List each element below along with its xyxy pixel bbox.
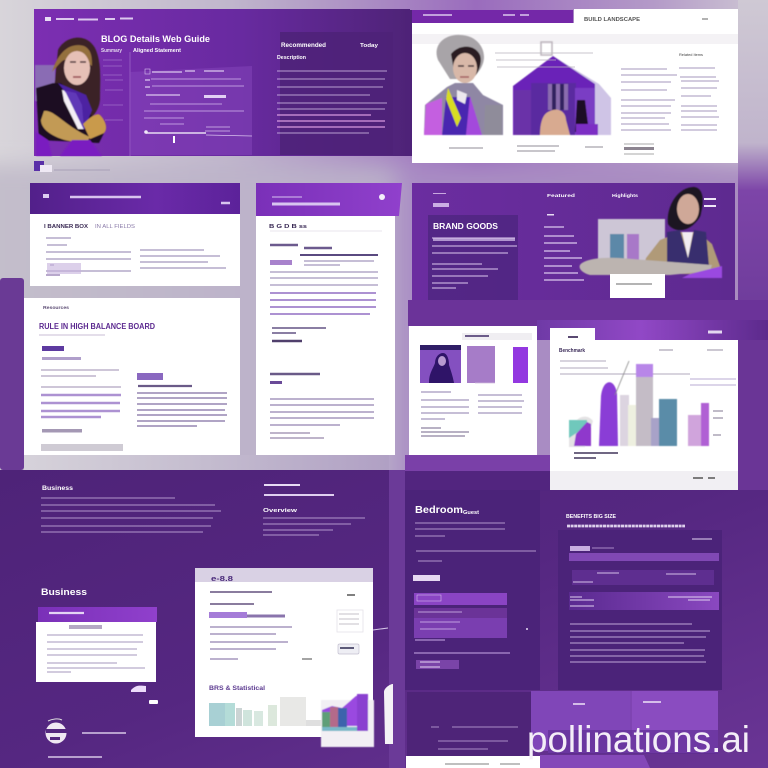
card header (38, 607, 157, 622)
top navigation (45, 17, 133, 21)
heading: B G D B ss (269, 224, 307, 230)
caption block (624, 144, 654, 154)
text card left (428, 193, 518, 300)
illustration: woman at desk (580, 187, 722, 278)
subsection two (272, 328, 326, 341)
article title: RULE IN HIGH BALANCE BOARD (39, 322, 155, 331)
right heading (612, 193, 716, 206)
body text (570, 624, 710, 662)
text section: top left dark: Business (42, 486, 74, 492)
sidebar menu: Summary (101, 48, 122, 54)
illustration: purple house with hand (513, 42, 611, 135)
report text (209, 592, 363, 659)
panel: hero with woman (34, 9, 410, 156)
small label: Resources (43, 305, 70, 310)
chart block (467, 346, 528, 383)
heading: IN ALL FIELDS (95, 224, 136, 230)
subsection one (270, 245, 378, 314)
column text (415, 523, 536, 561)
legend (690, 379, 736, 435)
overlapping report sheet (321, 694, 374, 747)
card text (47, 625, 145, 672)
subsection three (270, 374, 374, 438)
pale bar chart (209, 697, 322, 726)
panel: dark column with small cards (405, 490, 540, 690)
small button (416, 660, 459, 669)
column title: Bedroom (415, 505, 463, 516)
body text (46, 238, 226, 276)
article text columns (621, 52, 719, 130)
panel: white card with purple header (36, 607, 157, 682)
right text column: Description (277, 55, 307, 61)
card heading: Benchmark (559, 348, 585, 354)
logo caption (48, 733, 126, 757)
sidebar menu (101, 48, 130, 156)
card stack (414, 593, 507, 638)
panel: dark report with rows (558, 514, 722, 690)
tag button (338, 644, 359, 654)
logo: globe emblem (46, 719, 68, 744)
illustration: woman in scarf (424, 35, 503, 135)
report title (566, 514, 685, 526)
image: portrait (420, 345, 461, 383)
decorative white marks (131, 686, 158, 704)
panel: light purple lower block (531, 691, 718, 754)
panel: small article with image (409, 326, 537, 455)
rule (414, 640, 510, 653)
illustration: woman with crossed arms (35, 38, 106, 156)
right column (137, 373, 227, 426)
footer lines (421, 428, 469, 436)
panel: bar chart card (550, 328, 738, 490)
text section: top middle dark: Overview (263, 508, 298, 514)
middle column (544, 193, 584, 280)
text section: top left dark (41, 486, 221, 532)
watermark: pollinations.ai (527, 719, 750, 760)
article text columns: Related Items (679, 52, 703, 57)
middle column: Featured (547, 193, 575, 198)
heading (269, 224, 382, 231)
panel: dark lower left block (407, 692, 532, 756)
header title (574, 9, 738, 34)
right heading: Highlights (612, 193, 639, 198)
hero title: BLOG Details Web Guide (101, 34, 210, 45)
white side tab (384, 684, 393, 744)
text section: top middle dark (263, 485, 365, 535)
left column (39, 335, 123, 451)
header bar (412, 10, 573, 23)
right text column (277, 32, 393, 155)
panel: report card with chart (195, 568, 393, 747)
column title: Guest (463, 510, 479, 516)
glass form panel (130, 66, 252, 155)
column title (415, 505, 479, 516)
right text column: Recommended (281, 42, 326, 49)
header title: BUILD LANDSCAPE (584, 17, 640, 23)
panel: card with header, top left (30, 183, 240, 286)
subtitle: Aligned Statement (133, 48, 181, 54)
report title: e-8.8 (211, 576, 233, 583)
subtitle lines (560, 361, 690, 374)
section heading: Business (41, 587, 87, 598)
header (256, 183, 402, 216)
callout leader lines (495, 53, 593, 67)
right text column: Today (360, 43, 378, 49)
body text (421, 392, 524, 419)
footer (693, 477, 715, 479)
small logo below hero (34, 161, 110, 172)
chart title: BRS & Statistical (209, 685, 265, 692)
white caption card (610, 274, 665, 298)
caption (574, 453, 618, 458)
text card left: BRAND GOODS (433, 222, 499, 231)
panel: tall article (256, 183, 402, 455)
panel: white article with portraits and house (405, 9, 738, 163)
heading (462, 333, 532, 340)
label (413, 575, 440, 581)
heading (44, 224, 136, 230)
panel: large white article (24, 298, 240, 455)
row two (572, 570, 714, 585)
row three (569, 592, 719, 610)
heading: I BANNER BOX (44, 224, 88, 230)
row one (569, 539, 719, 561)
panel: purple feature with woman at desk (412, 183, 735, 300)
header (30, 183, 240, 214)
captions (449, 146, 603, 151)
bars (569, 361, 709, 447)
report title: BENEFITS BIG SIZE (566, 514, 616, 520)
panel: white strip at bottom (406, 755, 650, 768)
